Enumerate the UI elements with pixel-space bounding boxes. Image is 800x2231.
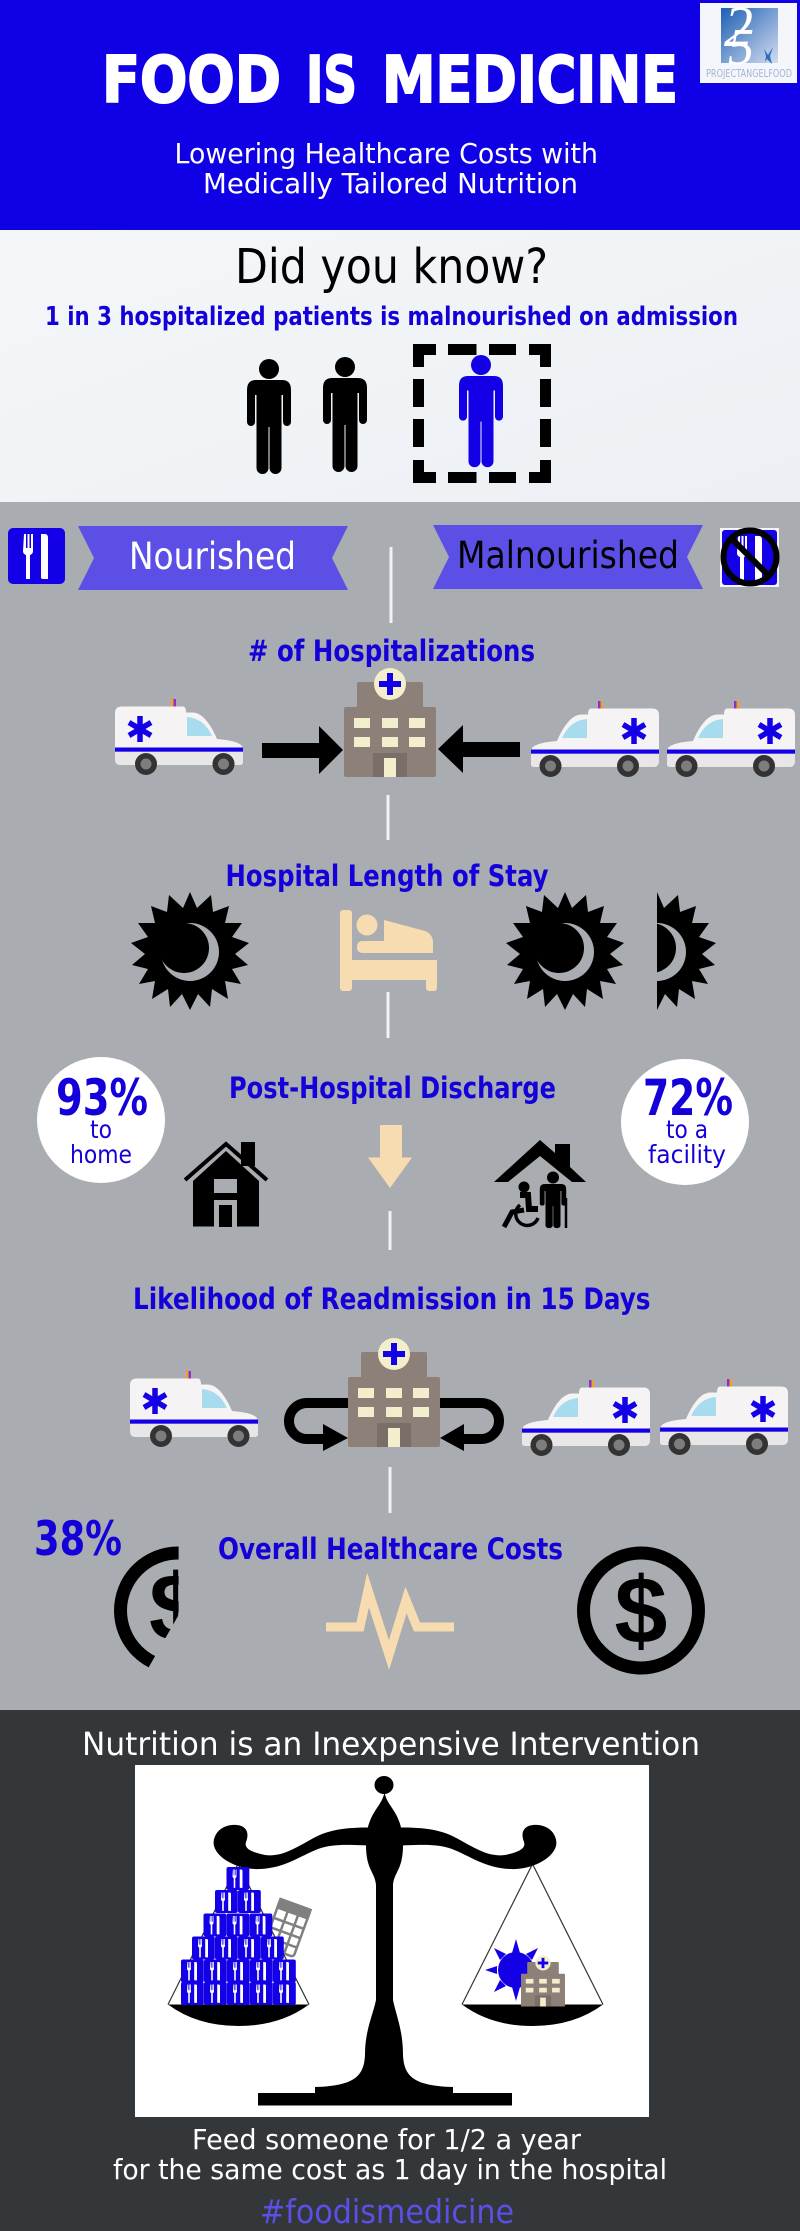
caption: for the same cost as 1 day in the hospital xyxy=(113,2153,667,2186)
icon: partial dollar coin: $ xyxy=(149,1555,202,1661)
banner: nourished: Nourished xyxy=(129,535,296,578)
icon: ambulance malnourished 1 xyxy=(531,701,659,777)
heading: intervention: Nutrition is an Inexpensive Intervention xyxy=(82,1725,700,1763)
icon: small hospital xyxy=(521,1956,565,2007)
icon: hospital xyxy=(348,1338,440,1447)
title xyxy=(102,44,678,118)
title: FOOD xyxy=(102,44,281,118)
icon: one day xyxy=(131,892,249,1010)
icon: hospital xyxy=(344,668,436,777)
icon: partial dollar coin xyxy=(114,1546,179,1668)
icon: blue sun xyxy=(485,1939,538,2001)
icon: care facility xyxy=(494,1140,586,1228)
caption: Feed someone for 1/2 a year xyxy=(192,2123,581,2156)
icon: ambulance malnourished 2 xyxy=(667,701,795,777)
scale stand and beam xyxy=(168,1776,603,2106)
calendar icon xyxy=(263,1899,311,1957)
panel: comparison xyxy=(0,502,800,1710)
caption xyxy=(113,2123,667,2186)
arrow: left loop xyxy=(289,1403,348,1451)
icon: person 1 xyxy=(247,359,291,474)
subtitle xyxy=(174,137,598,200)
callout: 72 percent to a facility: facility xyxy=(648,1140,726,1169)
callout: 72 percent to a facility: 72% xyxy=(643,1069,733,1127)
panel: inexpensive intervention xyxy=(0,1710,800,2231)
icon: ambulance malnourished 2 xyxy=(660,1379,788,1455)
stack of meals xyxy=(181,1867,296,2005)
icon: ambulance nourished xyxy=(130,1371,258,1447)
arrow: right into hospital xyxy=(438,725,520,773)
heading: length of stay: Hospital Length of Stay xyxy=(226,859,549,893)
subtitle: Lowering Healthcare Costs with xyxy=(174,137,598,170)
heading: did you know: Did you know? xyxy=(235,239,548,295)
hashtag: #foodismedicine xyxy=(260,2192,514,2231)
icon: fork and knife xyxy=(8,528,65,584)
row: readmission graphic xyxy=(130,1338,788,1456)
subtitle: Medically Tailored Nutrition xyxy=(203,167,578,200)
arrow: left into hospital xyxy=(262,726,343,774)
banner: nourished xyxy=(78,526,348,590)
callout: 93 percent to home: to xyxy=(90,1115,112,1144)
title: IS xyxy=(306,44,357,118)
icon: ambulance malnourished 1 xyxy=(522,1380,650,1456)
title: MEDICINE xyxy=(382,44,678,118)
chart: pulse line xyxy=(326,1590,454,1655)
heading: discharge: Post-Hospital Discharge xyxy=(229,1071,556,1105)
heading: hospitalizations: # of Hospitalizations xyxy=(248,634,535,668)
icon: dollar coin xyxy=(584,1553,698,1668)
icon: bed xyxy=(340,910,437,991)
banner: malnourished xyxy=(433,525,703,589)
banner: malnourished: Malnourished xyxy=(457,534,679,577)
scale illustration xyxy=(135,1765,649,2117)
arrow: discharge down xyxy=(368,1125,412,1188)
header band xyxy=(0,0,800,230)
scale strings xyxy=(168,1864,603,2004)
icon: malnourished person in dashed frame xyxy=(413,344,551,483)
icon: one and a half days xyxy=(506,892,716,1010)
callout: 93 percent to home xyxy=(37,1057,165,1183)
heading: readmission: Likelihood of Readmission in 15 Days xyxy=(133,1282,650,1316)
logo: Project Angel Food 25: 5 xyxy=(728,19,754,76)
icon: dollar coin: $ xyxy=(614,1558,667,1664)
callout: 72 percent to a facility: to a xyxy=(666,1115,708,1144)
heading: costs: Overall Healthcare Costs xyxy=(218,1532,563,1566)
statistic: 38 percent: 38% xyxy=(34,1512,122,1567)
icon: home xyxy=(185,1142,267,1227)
logo: Project Angel Food 25 xyxy=(700,0,797,83)
callout: 93 percent to home: home xyxy=(70,1140,132,1169)
callout: 72 percent to a facility xyxy=(621,1059,749,1185)
icon: ambulance nourished xyxy=(115,699,243,775)
arrow: right loop xyxy=(440,1403,499,1451)
callout: 93 percent to home: 93% xyxy=(56,1069,148,1127)
row: hospitalizations graphic xyxy=(115,668,795,777)
panel: did you know xyxy=(0,230,800,502)
icon: person 2 xyxy=(323,357,367,472)
icon: no food xyxy=(720,528,779,587)
